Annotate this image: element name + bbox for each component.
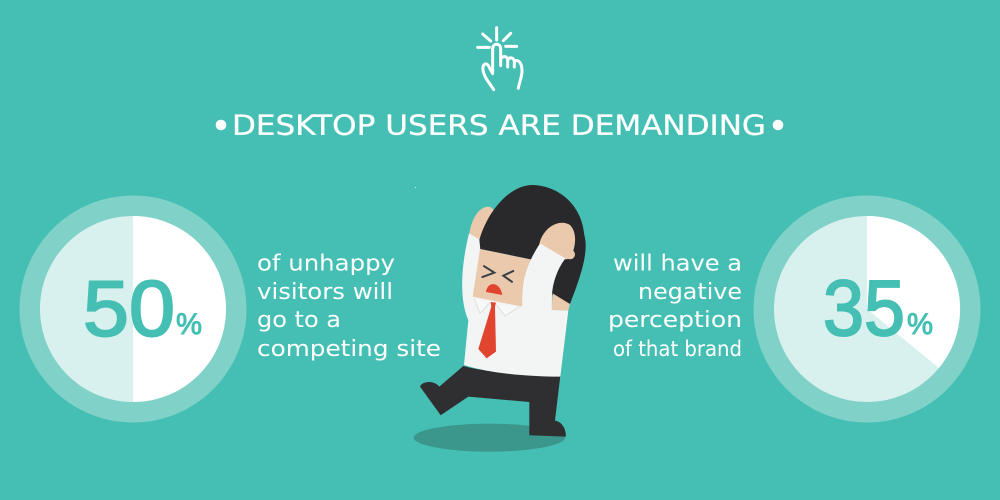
text: left statement: competing site [257, 336, 441, 362]
text: left statement [257, 250, 441, 362]
donut: 35 percent: 35 [823, 263, 905, 352]
stray dot [415, 187, 416, 188]
tie [478, 302, 496, 358]
trousers [420, 366, 566, 437]
text: right statement: negative [638, 279, 742, 305]
text: left statement: go to a [257, 307, 341, 333]
illustration: stressed man [414, 185, 586, 452]
left hand [469, 207, 494, 248]
text: left statement: of unhappy [257, 250, 395, 276]
text: right statement: will have a [613, 250, 742, 276]
donut: 35 percent: % [907, 308, 933, 341]
right sleeve [522, 243, 565, 331]
donut: 50 percent [20, 196, 246, 422]
text: left statement: visitors will [257, 279, 393, 305]
icon: tapping hand [478, 28, 522, 90]
face [473, 249, 531, 307]
donut: 50 percent: % [176, 308, 202, 341]
text: right statement [608, 250, 742, 362]
neck skin [552, 293, 570, 311]
hair [477, 185, 586, 304]
donut: 50 percent: 50 [83, 264, 175, 352]
text: right statement: perception [608, 307, 742, 333]
text: right statement: of that brand [613, 337, 742, 362]
collar [474, 298, 519, 316]
right hand [539, 223, 575, 260]
ground shadow [414, 424, 565, 452]
heading: DESKTOP USERS ARE DEMANDING [232, 110, 766, 142]
donut: 35 percent [754, 196, 980, 422]
shirt [462, 233, 568, 377]
mouth [486, 284, 502, 295]
eyes [482, 266, 514, 282]
